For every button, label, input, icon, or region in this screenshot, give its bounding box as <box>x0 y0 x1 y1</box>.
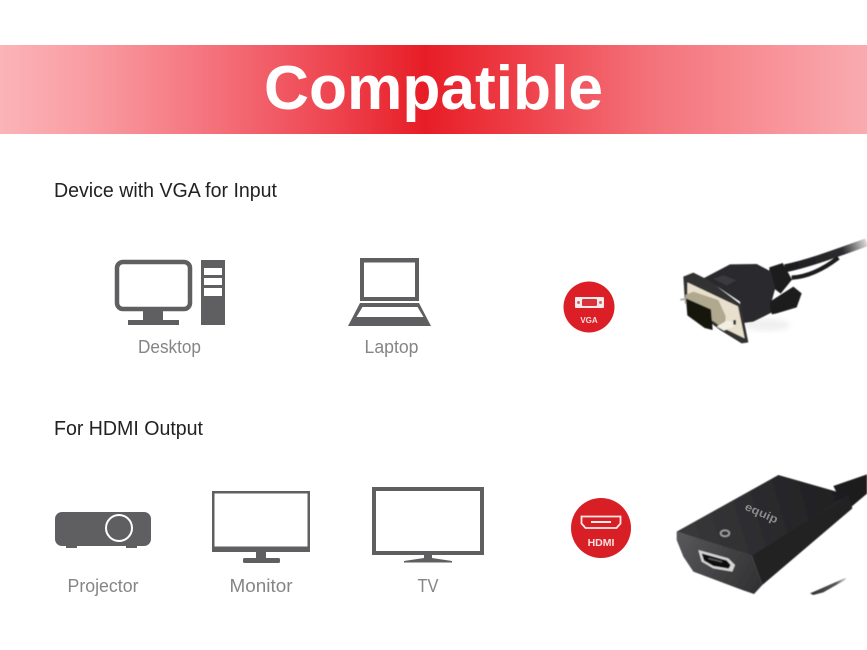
label: projector: Projector <box>68 576 139 596</box>
label: monitor: Monitor <box>230 576 292 596</box>
heading: VGA input: Device with VGA for Input <box>54 180 277 202</box>
icon: laptop <box>348 258 431 326</box>
title: Compatible <box>264 54 603 123</box>
icon: TV <box>372 487 484 562</box>
badge: HDMI <box>571 498 631 558</box>
logo text: equip <box>743 501 780 526</box>
photo: VGA connector cable <box>680 242 867 343</box>
icon: HDMI port <box>582 516 620 528</box>
badge: HDMI: HDMI <box>588 537 614 549</box>
badge: VGA: VGA <box>580 316 598 325</box>
heading: HDMI output: For HDMI Output <box>54 418 203 440</box>
banner <box>0 45 867 134</box>
badge: VGA <box>564 282 614 332</box>
label: TV: TV <box>418 576 438 596</box>
icon: VGA port <box>575 297 604 308</box>
label: laptop: Laptop <box>364 337 418 357</box>
icon: monitor <box>212 491 310 563</box>
icon: desktop <box>117 260 225 325</box>
icon: projector <box>55 512 151 548</box>
photo: HDMI adapter <box>677 474 867 595</box>
label: desktop: Desktop <box>138 337 201 357</box>
